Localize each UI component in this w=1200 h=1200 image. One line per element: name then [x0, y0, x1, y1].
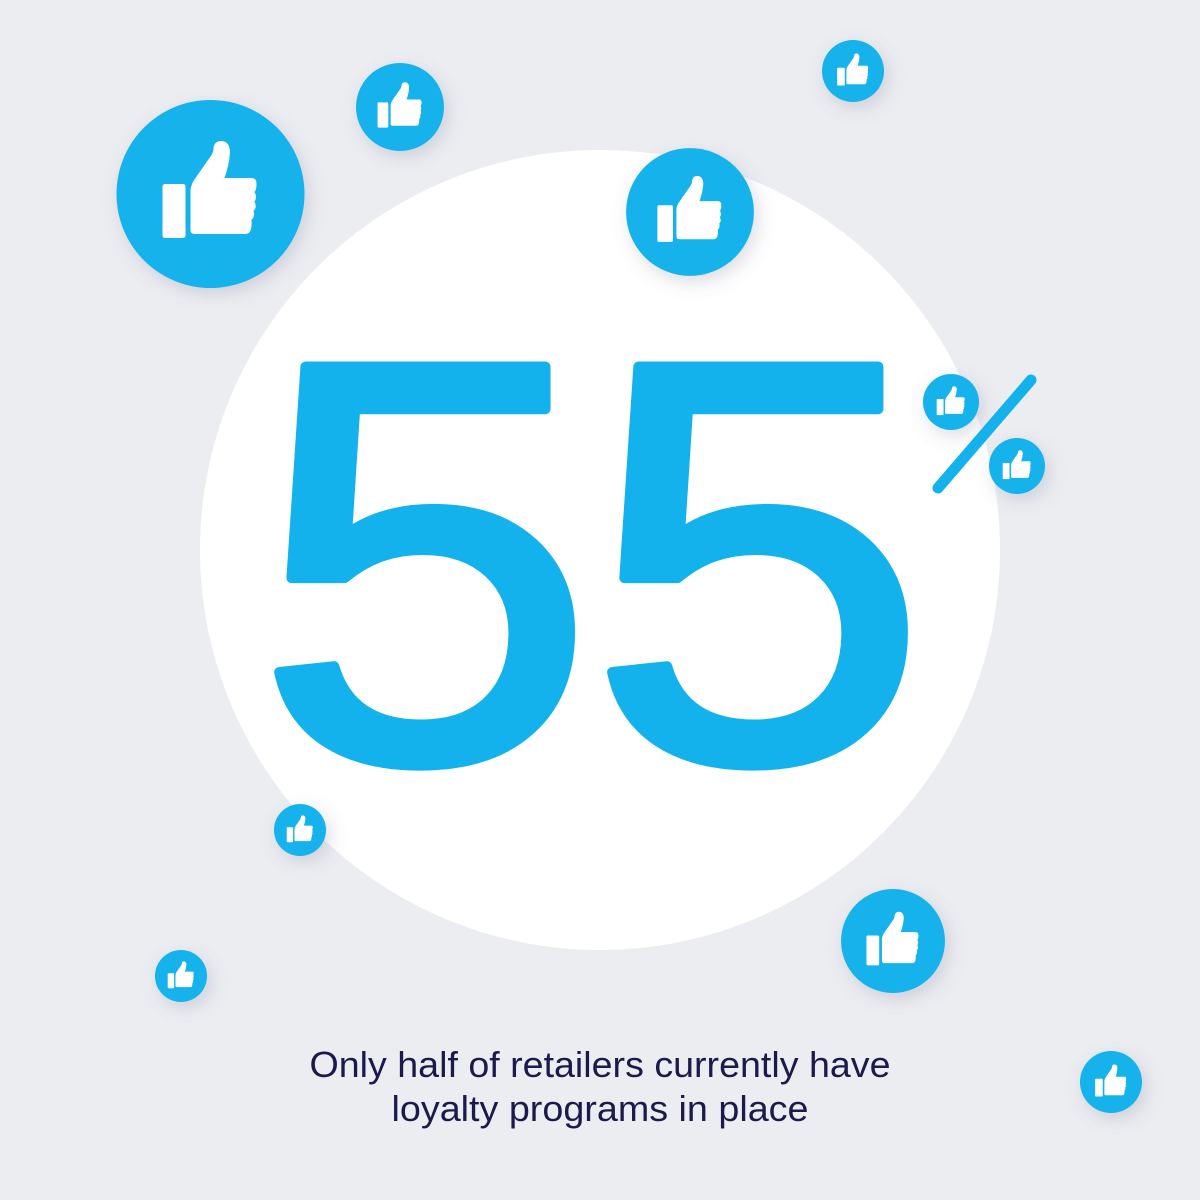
- white central circle: [200, 150, 1000, 950]
- icon: thumbs-up badge on circle edge: [626, 148, 754, 276]
- caption text: Only half of retailers currently have: [310, 1044, 890, 1085]
- icon: thumbs-up badge lower right: [841, 889, 945, 993]
- icon: thumbs-up badge percent lower: [989, 438, 1045, 494]
- percent sign slash: [938, 380, 1031, 488]
- icon: thumbs-up badge lower left: [274, 804, 326, 856]
- icon: thumbs-up badge top: [356, 63, 444, 151]
- icon: thumbs-up badge far lower left: [155, 950, 207, 1002]
- icon: thumbs-up badge percent upper: [923, 374, 979, 430]
- icon: thumbs-up badge top right: [822, 40, 884, 102]
- icon: thumbs-up badge bottom right: [1080, 1051, 1142, 1113]
- icon: large thumbs-up badge top left: [116, 100, 304, 288]
- caption text: loyalty programs in place: [392, 1088, 808, 1129]
- big number 55: 55: [255, 242, 921, 882]
- caption text: [310, 1044, 890, 1129]
